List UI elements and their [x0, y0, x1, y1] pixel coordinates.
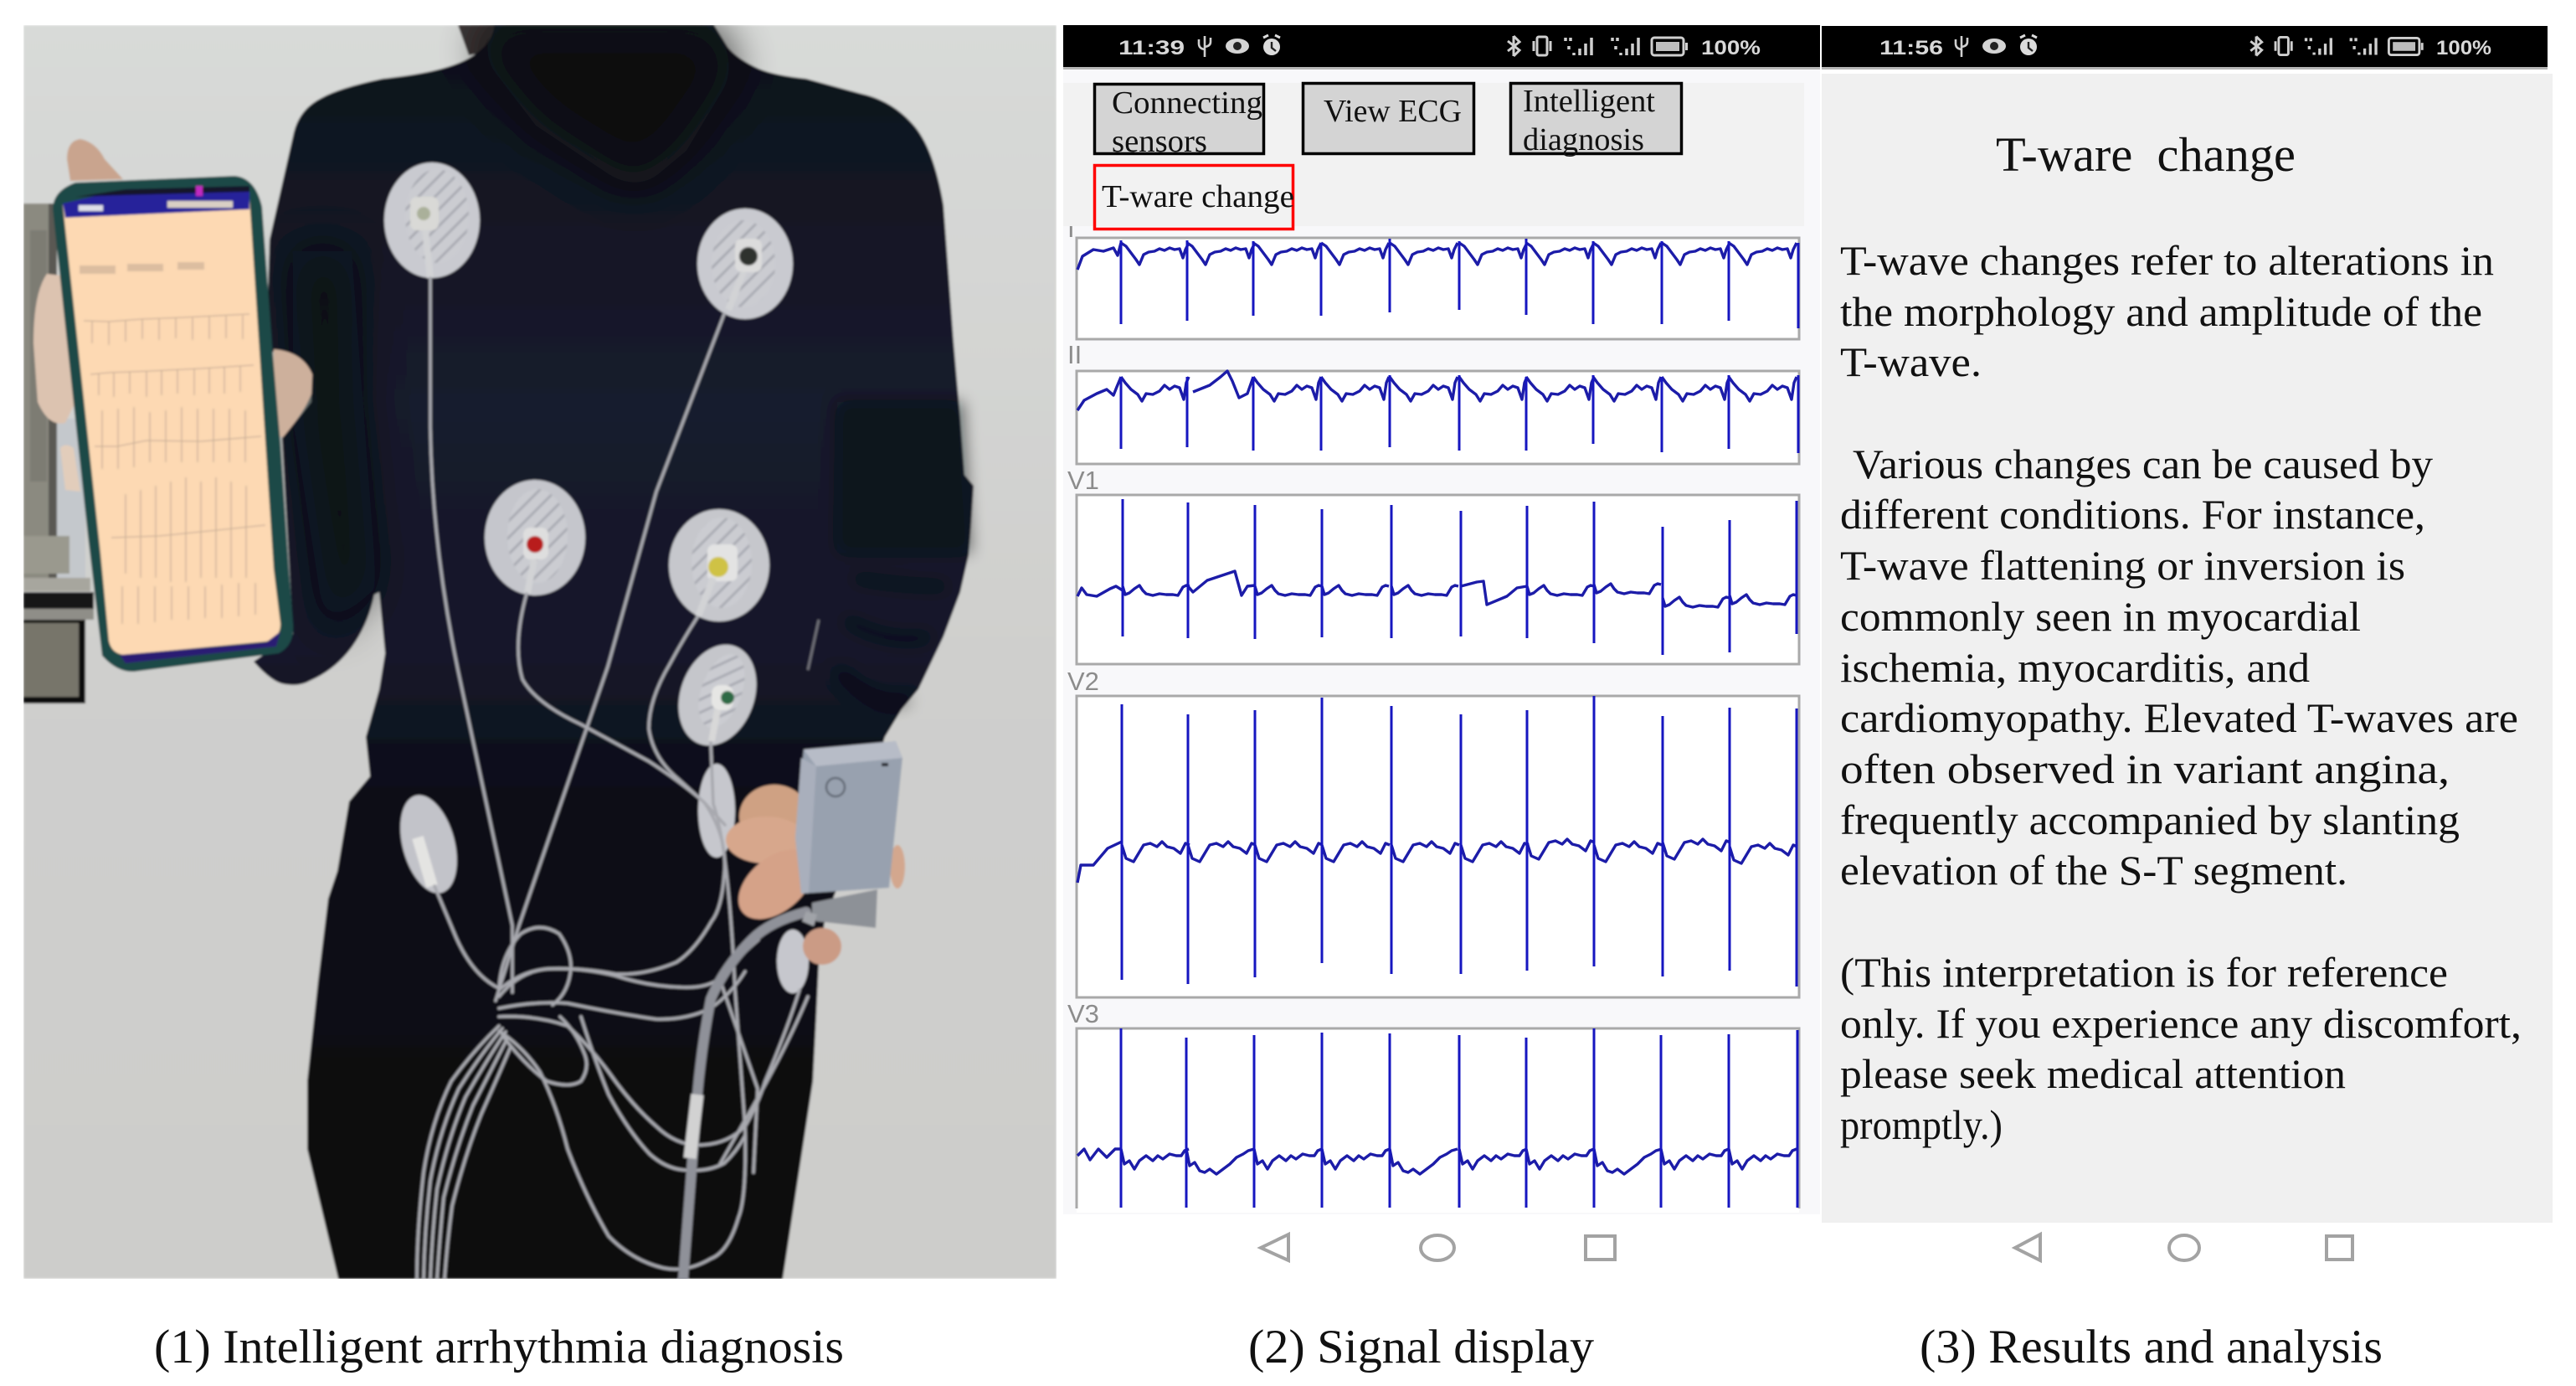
caption 1: (1) Intelligent arrhythmia diagnosis: [154, 1321, 844, 1373]
button: T-ware change: [1095, 166, 1294, 229]
lead label V2: V2: [1067, 667, 1099, 696]
ECG electrode: lower right: [777, 930, 809, 993]
phone bottom edge: [120, 631, 280, 663]
paragraph: causes: commonly seen in myocardial: [1840, 593, 2361, 640]
paragraph: disclaimer: (This interpretation is for reference: [1840, 949, 2448, 996]
ECG electrode: red lead: [485, 480, 585, 595]
caption 2: (2) Signal display: [1248, 1321, 1595, 1373]
paragraph: definition: the morphology and amplitude of the: [1840, 288, 2482, 335]
wall background: [23, 25, 1057, 1279]
status bar: 100%: [2436, 37, 2491, 59]
ECG electrode: white lead: [384, 162, 480, 278]
paragraph: causes: Various changes can be caused by: [1853, 441, 2433, 487]
lead label V1: V1: [1067, 466, 1099, 495]
paragraph: causes: elevation of the S-T segment.: [1840, 847, 2347, 894]
button: connecting sensors: Connecting: [1112, 85, 1262, 121]
navigation bar icons: [2015, 1234, 2352, 1260]
ECG strip: lead I: [1077, 238, 1799, 339]
left hand holding phone: [33, 139, 312, 492]
navigation bar icons: [1261, 1234, 1615, 1260]
paragraph: causes: often observed in variant angina,: [1840, 745, 2450, 792]
paragraph: causes: cardiomyopathy. Elevated T-waves are: [1840, 694, 2518, 741]
text background: [1822, 74, 2553, 1223]
panel: signal display screen: [1063, 25, 1820, 1260]
right hand holding sensor: [726, 785, 905, 965]
button: connecting sensors: [1095, 84, 1264, 159]
paragraph: causes: ischemia, myocarditis, and: [1840, 644, 2310, 691]
button: T-ware change: T-ware change: [1102, 179, 1294, 214]
phone screen: [63, 198, 280, 655]
ECG strip: lead II: [1077, 371, 1799, 464]
phone ECG traces: [84, 314, 265, 624]
ECG electrode: yellow lead: [669, 509, 769, 621]
paragraph: causes: T-wave flattening or inversion is: [1840, 542, 2405, 589]
button: connecting sensors: sensors: [1112, 124, 1207, 159]
ECG strip: lead V3: [1077, 1028, 1799, 1213]
lead label II: II: [1067, 340, 1082, 369]
status bar: 11:56: [1879, 37, 1943, 59]
panel: photo of wearable ECG system: [23, 25, 1057, 1279]
status bar: [1822, 26, 2548, 70]
phone on-screen buttons: [80, 262, 204, 274]
ECG electrode: left side: [391, 789, 499, 988]
button: intelligent diagnosis: Intelligent: [1523, 84, 1655, 119]
lead wires: [417, 278, 808, 1279]
paragraph: causes: different conditions. For instance,: [1840, 491, 2425, 538]
ECG electrode: green lead: [676, 643, 758, 748]
status bar: 11:39: [1118, 37, 1185, 59]
heading: T-ware change: [1996, 127, 2296, 182]
status bar: 100%: [1701, 37, 1761, 59]
ECG electrode: black lead: [697, 209, 793, 319]
paragraph: definition: T-wave changes refer to alterations in: [1840, 237, 2494, 284]
paragraph: causes: frequently accompanied by slanting: [1840, 796, 2460, 843]
paragraph: definition: [1840, 237, 2494, 385]
phone status bar: [63, 188, 249, 218]
paragraph: disclaimer: only. If you experience any discomfort,: [1840, 1000, 2522, 1047]
paragraph: disclaimer: please seek medical attention: [1840, 1050, 2346, 1097]
paragraph: disclaimer: [1840, 949, 2522, 1148]
panel: results and analysis screen: [1822, 26, 2553, 1260]
button: intelligent diagnosis: diagnosis: [1523, 122, 1644, 157]
door frame hardware: [23, 204, 94, 703]
torso and arms in dark turtleneck: [254, 25, 974, 1279]
paragraph: causes: [1840, 441, 2518, 894]
lead label I: I: [1067, 214, 1075, 243]
paragraph: disclaimer: promptly.): [1840, 1101, 2003, 1148]
wireless sensor box: [795, 741, 902, 928]
ECG electrode: right side: [698, 764, 735, 858]
smartphone showing ECG app: [53, 176, 293, 672]
ECG strip: lead V2: [1077, 696, 1799, 997]
button: intelligent diagnosis: [1510, 84, 1681, 157]
menu button area: [1063, 83, 1804, 229]
ECG strip: lead V1: [1077, 495, 1799, 664]
button: view ECG: [1303, 84, 1473, 154]
status bar: [1063, 25, 1820, 70]
lead label V3: V3: [1067, 999, 1099, 1028]
caption 3: (3) Results and analysis: [1920, 1321, 2383, 1373]
button: view ECG: View ECG: [1324, 94, 1462, 129]
paragraph: definition: T-wave.: [1840, 338, 1982, 385]
thick trunk cable: [683, 912, 806, 1279]
